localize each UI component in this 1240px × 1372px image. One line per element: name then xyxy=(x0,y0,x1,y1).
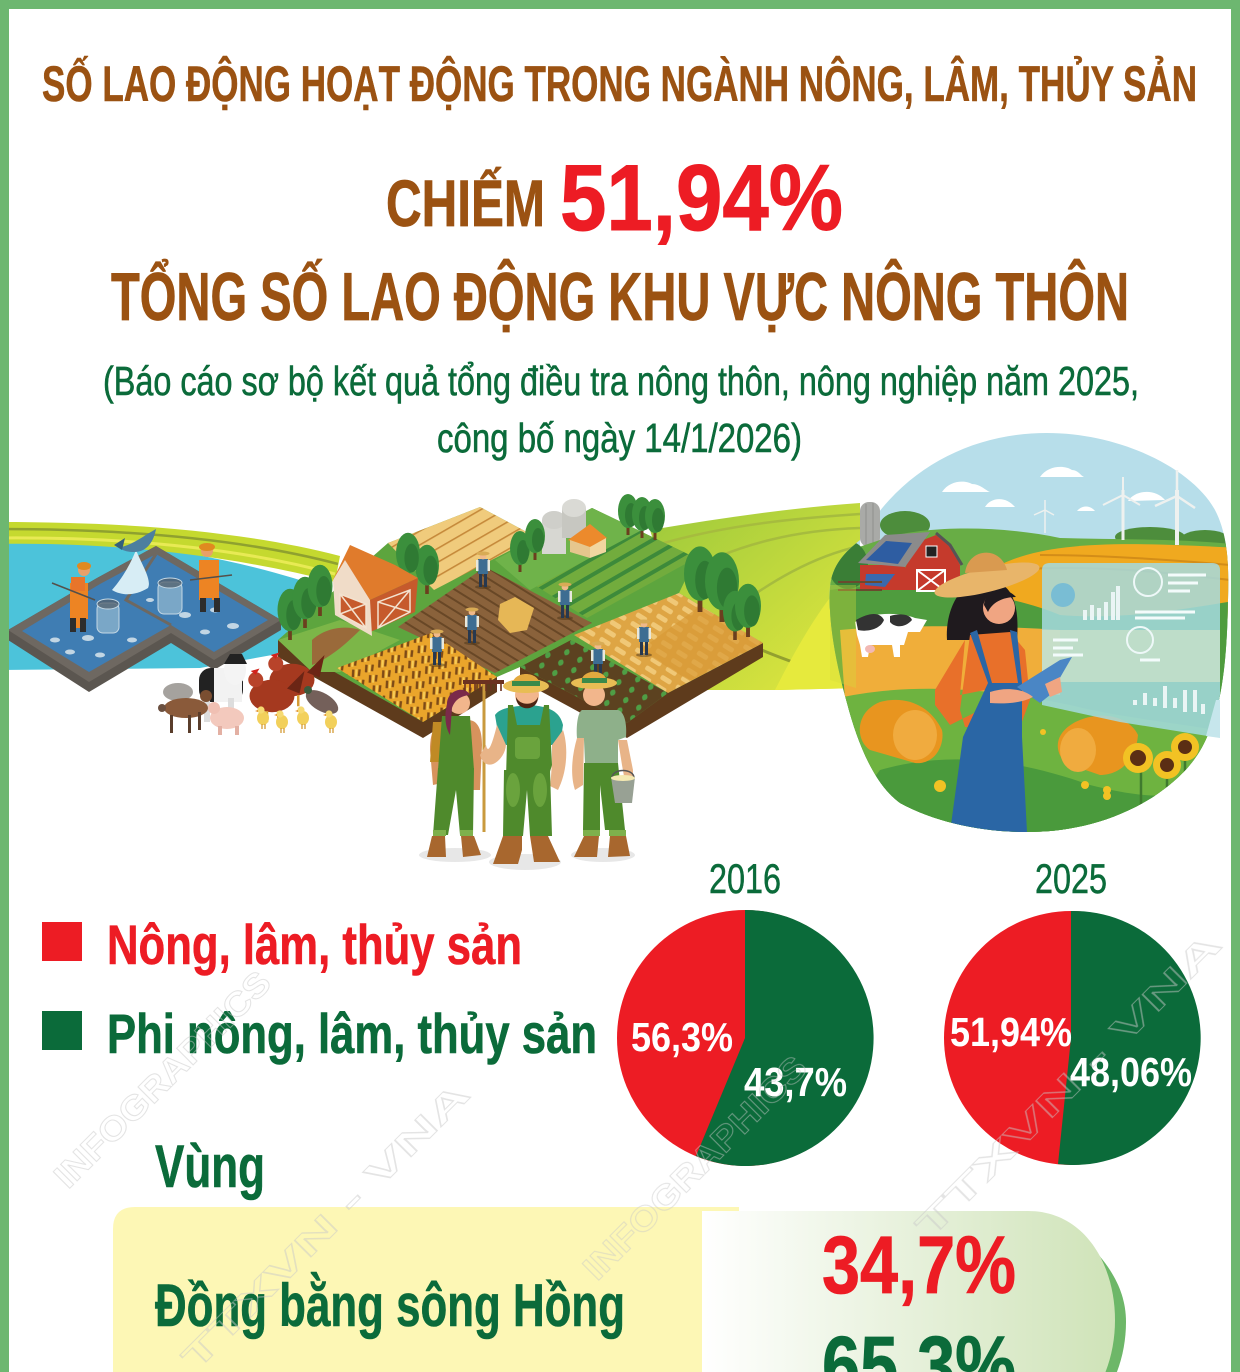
illustration: farm animals xyxy=(158,652,342,735)
watermarks xyxy=(47,925,1229,1372)
rake xyxy=(463,680,504,832)
value 51,94%: 51,94% xyxy=(950,1009,1072,1055)
value 56,3%: 56,3% xyxy=(631,1014,733,1060)
illustration: farm platform xyxy=(278,494,763,738)
back yellow field xyxy=(388,507,536,590)
hay stack xyxy=(498,597,534,633)
tan field xyxy=(574,593,763,693)
field farmers xyxy=(429,552,652,679)
brown field xyxy=(398,567,592,673)
worker right xyxy=(190,543,232,612)
background band: stripes and water xyxy=(0,522,340,670)
trees left xyxy=(278,565,332,640)
fish and splash xyxy=(112,529,156,594)
year label 2016: 2016 xyxy=(709,855,781,902)
dashboard screen xyxy=(1042,563,1220,738)
dashboard overflow xyxy=(1206,700,1220,738)
goats and sheep xyxy=(158,683,212,733)
right farmer xyxy=(571,672,635,857)
value panel xyxy=(702,1211,1115,1372)
silo xyxy=(860,502,880,547)
wind turbines xyxy=(1034,470,1195,545)
legend xyxy=(42,913,597,1065)
source note line 2: công bố ngày 14/1/2026) xyxy=(437,415,802,461)
net baskets xyxy=(97,578,182,633)
sky xyxy=(830,433,1228,697)
region name: Đồng bằng sông Hồng xyxy=(155,1272,625,1339)
title: share value: 51,94% xyxy=(560,145,843,250)
heading: region: Vùng xyxy=(155,1133,265,1200)
hills xyxy=(830,528,1228,832)
cow xyxy=(199,654,247,722)
barn xyxy=(333,545,418,636)
illustration: fish farming pond xyxy=(8,529,281,692)
upper green field xyxy=(495,508,696,618)
pond walls xyxy=(8,546,281,692)
yellow crop field xyxy=(1000,544,1240,620)
watermarks: INFOGRAPHICS xyxy=(576,1049,815,1288)
middle farmer xyxy=(480,674,566,864)
barn with solar panels xyxy=(828,532,962,591)
value 43,7%: 43,7% xyxy=(744,1059,847,1105)
hay bales xyxy=(860,700,1138,775)
green ground xyxy=(278,507,763,723)
trees behind barn xyxy=(396,533,439,594)
sunflowers xyxy=(1123,733,1199,805)
duck xyxy=(302,685,342,719)
value panel green edge xyxy=(900,1240,1126,1372)
legend label: non-agriculture: Phi nông, lâm, thủy sản xyxy=(107,1002,597,1065)
small flowers xyxy=(934,729,1111,800)
orange path xyxy=(840,626,1060,700)
legend swatch: non-agriculture xyxy=(42,1011,82,1050)
watermarks: TTXVN - VNA xyxy=(909,925,1229,1246)
legend label: agriculture: Nông, lâm, thủy sản xyxy=(107,913,522,976)
region row: Red River Delta xyxy=(113,1207,1126,1372)
pie chart 2016 xyxy=(617,855,874,1166)
watermarks: INFOGRAPHICS xyxy=(47,964,279,1196)
foreground grass xyxy=(845,688,1208,832)
tree group right xyxy=(684,546,761,640)
platform side walls xyxy=(278,640,763,738)
cow xyxy=(855,614,927,657)
soft field overlap xyxy=(830,585,856,688)
vegetable field xyxy=(520,640,668,723)
value 34,7%: 34,7% xyxy=(822,1220,1016,1311)
distant trees xyxy=(880,511,1226,546)
middle ground xyxy=(830,587,1228,832)
year label 2025: 2025 xyxy=(1035,855,1107,902)
woman farmer xyxy=(427,690,482,857)
wheat field xyxy=(337,633,497,722)
woman xyxy=(932,553,1072,832)
small trees xyxy=(510,494,665,572)
illustration: woman with smart farming tablet xyxy=(830,433,1228,832)
legend swatch: agriculture xyxy=(42,922,82,961)
silos and farmhouse xyxy=(542,499,607,558)
illustration: three farmers xyxy=(419,672,635,870)
pig xyxy=(208,702,244,735)
region name panel xyxy=(113,1207,739,1372)
value 48,06%: 48,06% xyxy=(1070,1049,1192,1095)
worker left xyxy=(52,562,95,632)
clouds xyxy=(942,467,1165,511)
ground shadows xyxy=(419,848,635,870)
ducklings xyxy=(255,706,337,733)
background fields right xyxy=(650,503,860,690)
chickens xyxy=(248,652,324,722)
title: share label: CHIẾM xyxy=(386,166,545,240)
pie chart 2025 xyxy=(944,855,1201,1165)
